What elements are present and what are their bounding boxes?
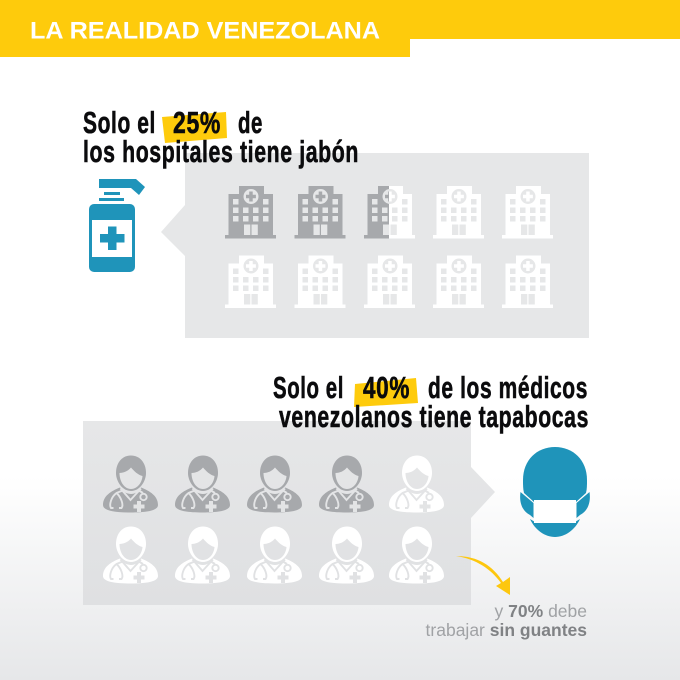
heading: doctors: de los médicos	[428, 370, 588, 405]
icon: doctor with mask 2	[175, 455, 230, 513]
heading: hospitals: Solo el	[83, 105, 156, 140]
icon: doctor without mask 9	[319, 526, 374, 584]
icon: doctor with mask 4	[319, 455, 374, 513]
icon: hospital without soap 4	[433, 186, 484, 238]
icon: hospital without soap 9	[433, 256, 484, 308]
icon: soap dispenser	[89, 179, 145, 272]
heading: hospitals: de	[238, 105, 263, 140]
icon: hospital half with soap	[364, 186, 415, 238]
doctor icon grid	[103, 455, 444, 584]
icon: doctor without mask 10	[389, 526, 444, 584]
icon: hospital without soap 7	[294, 256, 346, 308]
heading: hospitals: los hospitales tiene jabón	[83, 134, 359, 169]
icon: doctor without mask 5	[389, 455, 444, 513]
panel: doctors	[83, 421, 495, 605]
icon: doctor with mask 1	[103, 455, 158, 513]
heading: hospitals	[83, 105, 359, 169]
callout: gloves: y 70% debe	[495, 601, 587, 621]
highlight 40%	[354, 378, 418, 407]
icon: face mask	[520, 447, 590, 537]
icon: doctor without mask 8	[247, 526, 302, 584]
heading: doctors: Solo el	[273, 370, 344, 405]
icon: hospital without soap 5	[502, 186, 553, 238]
heading: doctors: 40%	[363, 370, 410, 405]
highlight 25%	[162, 112, 227, 143]
heading: hospitals: 25%	[173, 105, 221, 140]
header banner	[0, 0, 680, 57]
title: LA REALIDAD VENEZOLANA	[30, 18, 380, 44]
icon: doctor without mask 7	[175, 526, 230, 584]
callout: gloves: trabajar sin guantes	[426, 620, 587, 640]
icon: hospital with soap 2	[294, 186, 346, 238]
icon: hospital without soap 6	[225, 256, 276, 308]
panel: hospitals	[161, 153, 589, 338]
icon: doctor without mask 6	[103, 526, 158, 584]
arrow	[456, 556, 510, 595]
icon: hospital with soap 1	[225, 186, 276, 238]
icon: doctor with mask 3	[247, 455, 302, 513]
icon: hospital without soap 8	[364, 256, 415, 308]
heading: doctors	[273, 370, 589, 434]
icon: hospital without soap 10	[502, 256, 553, 308]
callout: gloves	[426, 601, 587, 640]
hospital icon grid	[225, 186, 553, 308]
